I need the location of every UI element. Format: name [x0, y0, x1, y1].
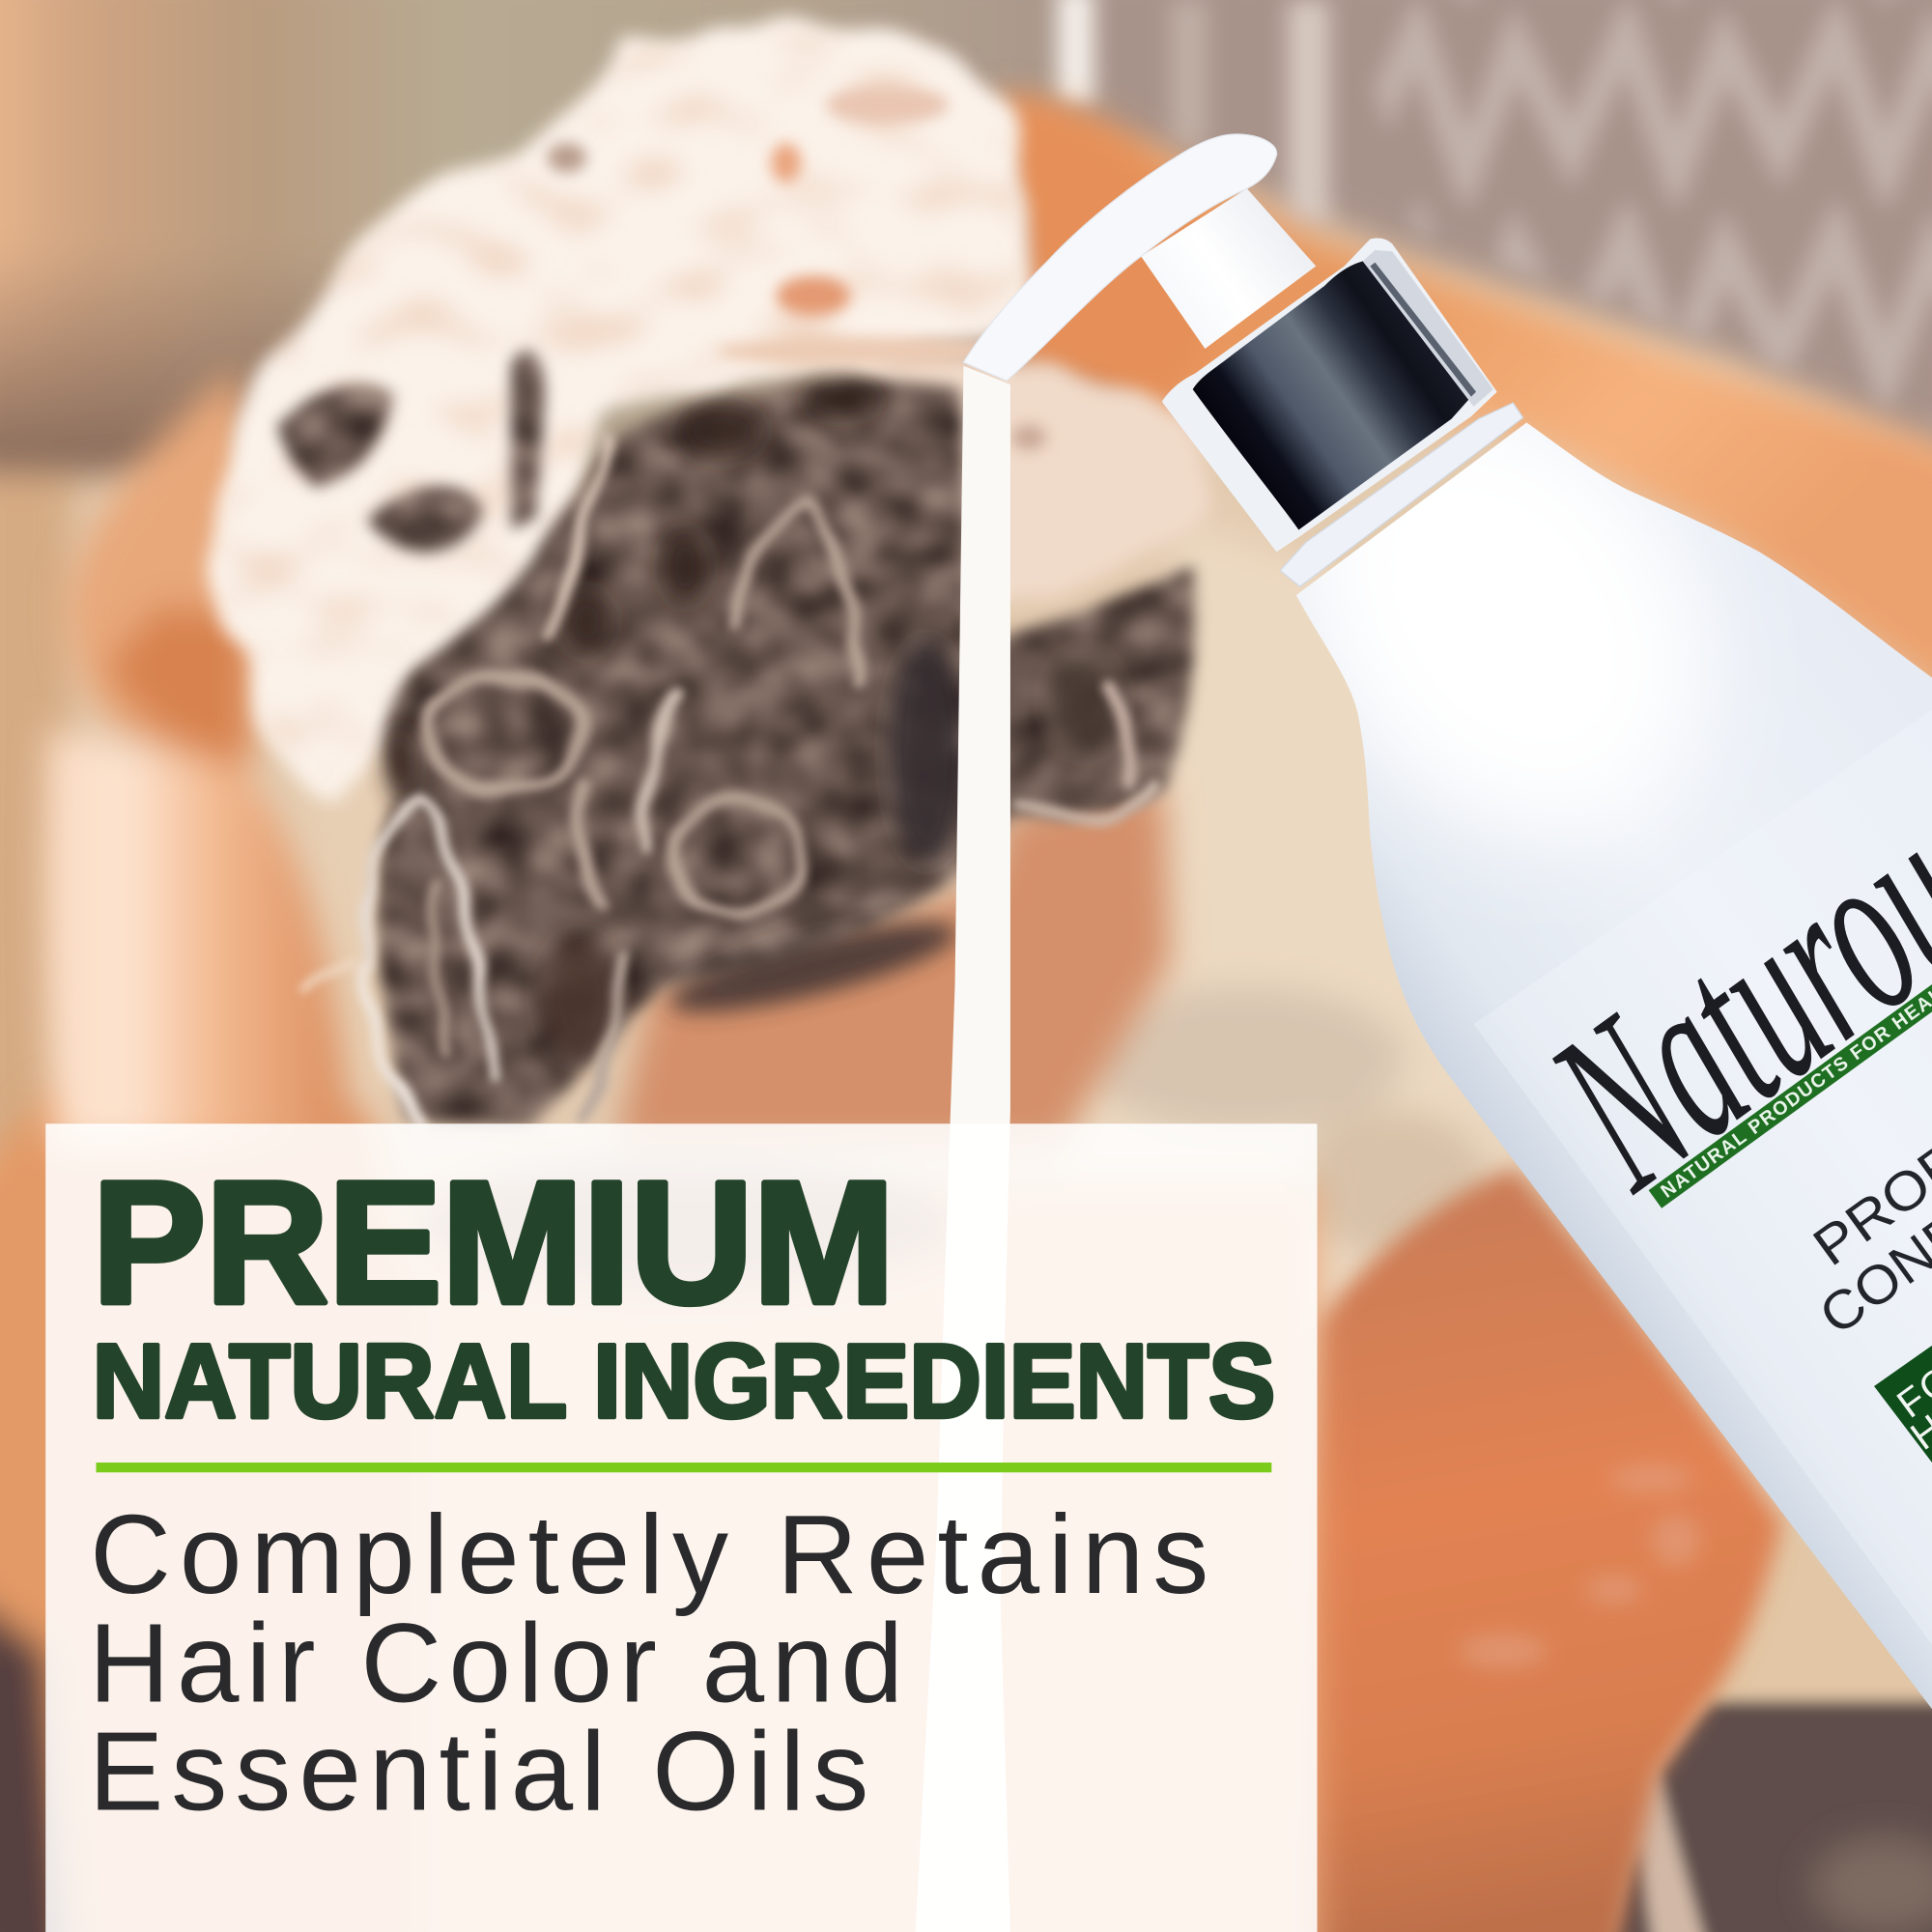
heading: natural ingredients: NATURAL INGREDIENTS — [93, 1322, 1275, 1440]
knit pattern — [1343, 0, 1932, 443]
left lower body — [0, 1084, 419, 1932]
foam tint — [220, 34, 1022, 782]
heading: premium: PREMIUM — [93, 1146, 895, 1340]
hair mass — [277, 350, 1195, 1127]
upper arm left — [67, 370, 268, 788]
body text: Completely Retains — [90, 1492, 1208, 1617]
collar metal — [1193, 261, 1471, 529]
floor light patch — [1811, 1836, 1932, 1932]
wall top left — [0, 0, 1133, 480]
body text: Essential Oils — [89, 1709, 868, 1834]
collar silver edge — [1363, 250, 1493, 407]
hand below stream — [856, 358, 1207, 632]
thigh water spots — [1459, 1463, 1700, 1668]
brand label text — [1507, 709, 1932, 1238]
text panel — [45, 1123, 1318, 1932]
hair beneath panel — [419, 1158, 961, 1293]
product: pump bottle — [963, 134, 1932, 1709]
wall streaks — [1057, 0, 1329, 228]
low right cream — [1700, 1509, 1932, 1725]
thigh — [1282, 1168, 1781, 1932]
tagline band — [1649, 886, 1932, 1208]
foam and hands — [211, 24, 1207, 799]
knit wall top right — [1060, 0, 1932, 469]
speckle zone — [1084, 985, 1405, 1133]
arm right — [1001, 94, 1932, 715]
pump stem — [1141, 188, 1316, 349]
body text — [89, 1492, 1208, 1834]
dark band — [0, 246, 382, 474]
mid lower skin under panel — [419, 1182, 1319, 1932]
neck — [616, 788, 1171, 1146]
collar silver lines — [1370, 263, 1476, 397]
neck ring — [1280, 403, 1523, 586]
hair shadows — [385, 385, 1119, 1060]
forearm left — [45, 727, 352, 1146]
bottle highlights and label sheet — [1296, 423, 1930, 1642]
cream mid right — [1060, 518, 1528, 1324]
body text: Hair Color and — [89, 1600, 903, 1725]
collar base — [1162, 238, 1497, 552]
green product badge — [1874, 1337, 1932, 1463]
bottle body — [1296, 423, 1932, 1709]
foam shading — [547, 85, 1046, 450]
hair strands — [301, 438, 1158, 1122]
pump head — [963, 134, 1277, 381]
beige behind shoulder — [296, 764, 407, 1109]
white pole — [1629, 1775, 1713, 1932]
left wall — [0, 480, 74, 1171]
conditioner stream — [916, 366, 1010, 1932]
orange hand fingers — [1001, 100, 1220, 419]
green divider — [96, 1463, 1271, 1472]
panel background — [45, 1123, 1318, 1932]
dark floor — [1602, 1700, 1932, 1932]
